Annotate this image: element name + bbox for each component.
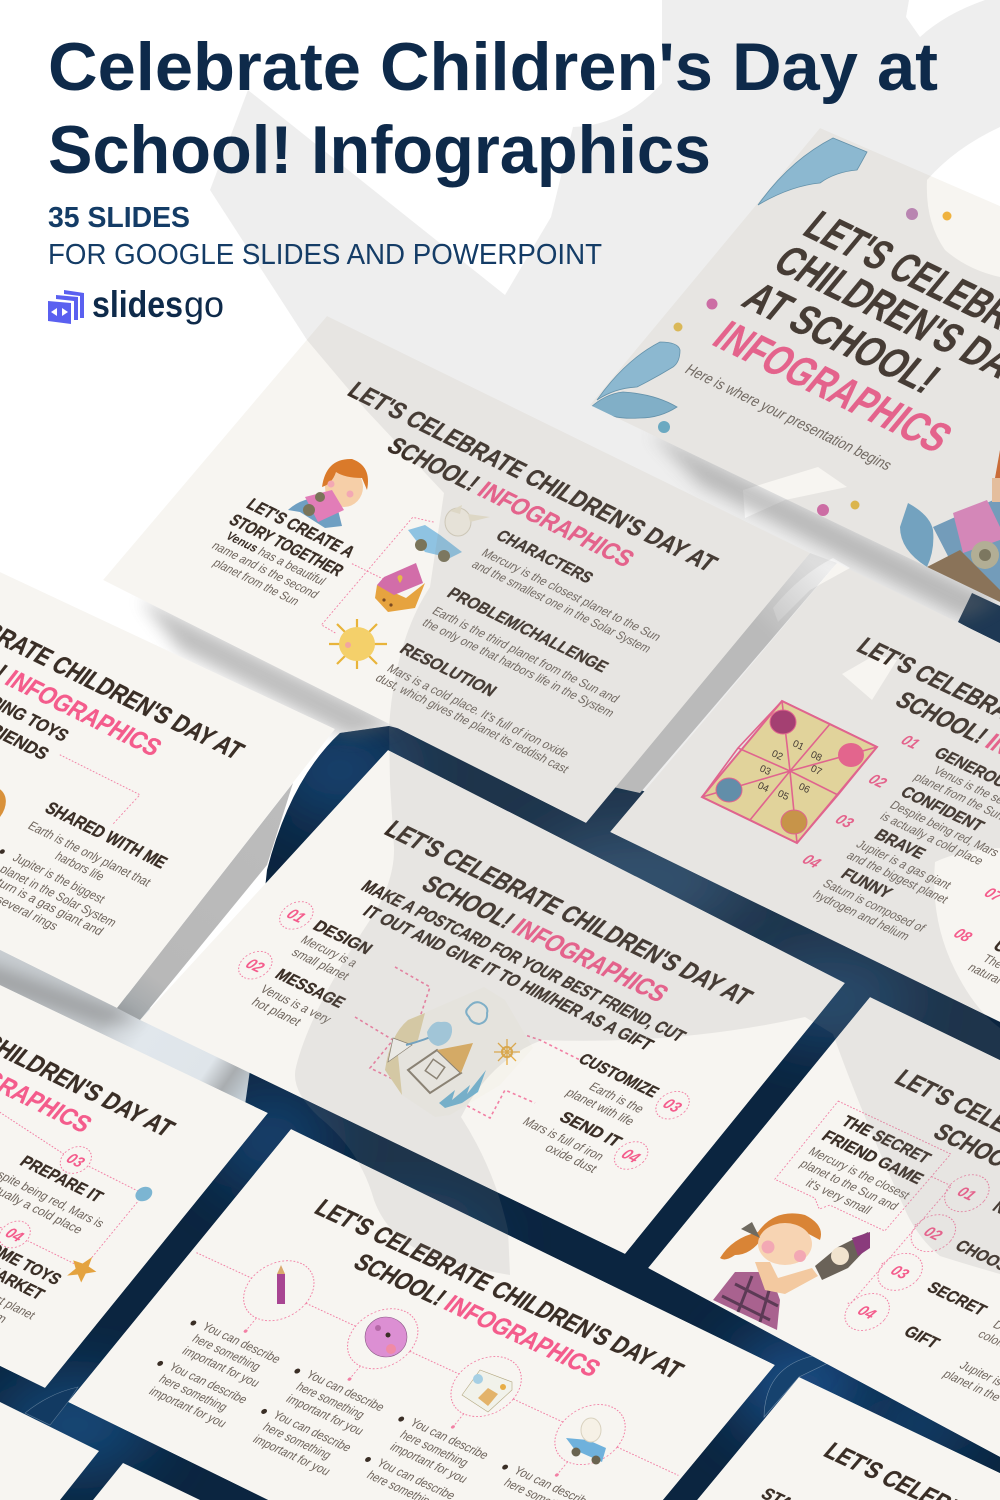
panel fold arc bottom left (25, 1387, 78, 1425)
heading: create a story: STORY TOGETHER (225, 511, 348, 580)
item 03 brave: and the biggest planet (844, 849, 952, 906)
text: prepare it: PREPARE IT (16, 1153, 107, 1206)
text: problem challenge: the only one that harbors life in the System (419, 616, 618, 720)
step 01 (279, 901, 374, 980)
item 04 funny: Saturn is composed of (820, 876, 929, 935)
column 3 bullets: here something (397, 1428, 472, 1470)
slide: sharing toys (0, 565, 335, 1008)
heading: swapping toys (0, 697, 69, 759)
step 03: Earth is the (586, 1080, 648, 1116)
step 04 (522, 1112, 648, 1173)
item 02 confident: Despite being red, Mars (887, 798, 1000, 859)
icon: small bunny car (566, 1418, 606, 1464)
callout text: planet to the Sun and (797, 1157, 902, 1213)
navy fragment under cover slide (958, 593, 1000, 645)
column 1 bullets: here something (189, 1332, 264, 1373)
diagram: paper fortune teller: 06 (797, 781, 812, 796)
item 02 confident: 02 (864, 771, 891, 792)
slide title: LET'S CELEBRATE CHILDREN'S DAY AT (378, 816, 758, 1011)
step 01: small planet (288, 946, 353, 983)
item 02 confident: is actually a cold place (877, 809, 987, 868)
icon: lower leaf two (590, 392, 677, 418)
step 03: 03 (659, 1096, 685, 1116)
cover title: INFOGRAPHICS (704, 312, 962, 461)
column 2 bullets: important for you (250, 1432, 334, 1478)
diagram: paper fortune teller: 02 (770, 748, 785, 763)
cover title: AT SCHOOL! (733, 274, 950, 402)
cover title (712, 210, 1000, 451)
column 2 bullets: important for you (283, 1392, 367, 1438)
step 03: planet with life (563, 1086, 638, 1128)
slide: prepare and buy (0, 942, 268, 1388)
number 04: 04 (1, 1225, 27, 1246)
text: venus description: name and is the second (209, 539, 322, 601)
shadow band between left slides (117, 783, 293, 1020)
item 01 generous (879, 729, 1000, 828)
item 08 unique: 08 (950, 925, 976, 946)
column 2 bullets: You can describe (303, 1368, 388, 1414)
text: characters: CHARACTERS (492, 527, 597, 587)
number circles: 03 (887, 1262, 913, 1283)
step 01: Mercury is a (298, 933, 361, 970)
column 1 bullets: You can describe (199, 1320, 284, 1366)
item 04 funny: 04 (798, 851, 825, 872)
text: prepare it (0, 1142, 123, 1242)
step 02: Venus is a very (257, 982, 335, 1026)
column 4 bullets (490, 1458, 596, 1500)
callout text: FRIEND GAME (818, 1127, 927, 1188)
number 03 (54, 1142, 98, 1178)
column 2 bullets: here something (293, 1380, 368, 1422)
illustration: boy with toy car (288, 459, 368, 528)
step 02 (238, 951, 346, 1026)
dashed connector (830, 1177, 951, 1304)
number 04 (0, 1217, 37, 1252)
icon: orange toy (0, 789, 6, 817)
text: buy toys (0, 1211, 68, 1335)
wordmark: slidesgo: go (184, 284, 224, 325)
icon: top leaf (758, 138, 867, 205)
icon: sun (329, 619, 387, 669)
diagram: paper fortune teller: 07 (809, 763, 824, 778)
slide: secret friend game (648, 997, 1000, 1457)
slide: bottom centre fragment (93, 1463, 200, 1500)
slide: bottom right (697, 1377, 1000, 1500)
slide title (0, 1036, 177, 1136)
icon: balloon (365, 1317, 407, 1357)
callout text (785, 1110, 943, 1226)
heading: create a story (230, 498, 354, 577)
slide title: INFOGRAPHICS (0, 666, 167, 762)
wordmark: slidesgo: slides (92, 284, 183, 325)
number circles: 04 (854, 1303, 880, 1323)
dashed connector (60, 754, 140, 824)
item 08 unique (934, 920, 1000, 1004)
slide title: SCHOOL! (416, 871, 520, 934)
callout text: it's very small (803, 1176, 875, 1217)
slide: cover (590, 128, 1000, 612)
icon: lower leaf (597, 342, 680, 400)
heading: make a postcard: MAKE A POSTCARD FOR YOUR BEST FRIEND, CUT (357, 876, 691, 1046)
step 02: 02 (241, 956, 268, 976)
slide title: INFOGRAPHICS (438, 1291, 606, 1382)
diagram: paper fortune teller: 04 (756, 780, 771, 795)
step 04: SEND IT (555, 1109, 625, 1151)
icon: small postcard (462, 1370, 512, 1412)
bullet list: planet in the Solar System (0, 862, 120, 930)
text: shared with me: Earth is the only planet that (25, 819, 154, 890)
callout text: THE SECRET (837, 1113, 935, 1167)
callout text: Mercury is the closest (805, 1144, 914, 1202)
step 04: Mars is full of iron (520, 1115, 607, 1163)
text: characters: Mercury is the closest planet to the Sun (479, 546, 664, 644)
slide title: LET'S CELEBRATE CHILDREN'S DAY AT (342, 377, 723, 577)
slide title: LET'S CELEBRATE CHILDREN'S DAY AT (309, 1195, 689, 1384)
slide: story together (103, 316, 810, 823)
item 02 confident (846, 769, 1000, 871)
main title (48, 29, 938, 188)
text: problem challenge: PROBLEM/CHALLENGE (443, 585, 612, 676)
subtitle: slide count: 35 SLIDES (48, 202, 190, 234)
slide: postcard (140, 750, 845, 1254)
diagram: paper fortune teller: 03 (758, 763, 773, 778)
navy backing panel (0, 726, 1000, 1500)
column 1 bullets (135, 1314, 284, 1431)
panel fold arc bottom right (764, 1355, 830, 1417)
slide: puzzle (610, 563, 1000, 1022)
bullet list: Jupiter is the biggest (10, 851, 109, 906)
slide title: SCHOOL! (889, 687, 993, 749)
soft shadow under second slide (140, 598, 400, 738)
slide title: SCHOOL! (348, 1249, 452, 1311)
step 04: oxide dust (542, 1141, 601, 1176)
slide title: INFOGRAPHICS (472, 477, 640, 572)
slide title (0, 625, 246, 758)
item 03 brave: Jupiter is a gas giant (853, 837, 955, 892)
slide title: SCHOOL! (381, 433, 485, 497)
step 02: hot planet (248, 995, 305, 1029)
dashed connector path (0, 1112, 139, 1264)
item descriptions (940, 1315, 1000, 1425)
number circles: 01 (953, 1184, 979, 1204)
illustration: child with toy (900, 450, 1000, 612)
icon: pencil (277, 1265, 285, 1304)
item 02 confident: CONFIDENT (897, 783, 988, 835)
step 04: 04 (617, 1146, 644, 1167)
dashed connectors to postcard (355, 967, 580, 1118)
column 2 bullets (239, 1362, 388, 1479)
column 1 bullets: important for you (146, 1384, 230, 1430)
soft shadow under cover slide (650, 432, 1000, 620)
item labels (884, 1197, 1000, 1358)
item 03 brave: BRAVE (871, 826, 929, 863)
column 1 bullets: You can describe (166, 1360, 251, 1407)
text: venus description: Venus has a beautiful (223, 529, 329, 588)
text: resolution: RESOLUTION (396, 640, 500, 700)
item 04 funny (781, 848, 942, 946)
illustration: postcard drawing (385, 1001, 524, 1108)
slide title: INFOGRAPHICS (506, 914, 674, 1008)
shadow band between top slides (613, 553, 837, 793)
column 2 bullets: You can describe (270, 1408, 355, 1455)
translucent background shape (210, 0, 1000, 1275)
heading: create a story: LET'S CREATE A (243, 495, 359, 561)
slide: four icons process (68, 1129, 775, 1500)
text: shared with me: SHARED WITH ME (41, 798, 171, 872)
text: characters: and the smallest one in the Solar System (469, 558, 654, 655)
diagram: paper fortune teller (702, 701, 877, 843)
text: shared with me: harbors life (52, 849, 108, 884)
item 04 funny: hydrogen and helium (810, 888, 913, 943)
step 02: MESSAGE (271, 966, 348, 1011)
dashed circles and links (162, 1225, 701, 1500)
number circles: 02 (920, 1224, 946, 1244)
shadow gap: pale area under left slide (0, 930, 250, 1105)
step 03: CUSTOMIZE (574, 1051, 662, 1101)
step 03 (564, 1054, 690, 1125)
cover subtitle: Here is where your presentation begins (681, 362, 895, 474)
item 01 generous: 01 (897, 732, 923, 753)
text: resolution: dust, which gives the planet its reddish cast (372, 671, 573, 776)
icon: bunny in car (408, 505, 490, 562)
column 3 bullets (352, 1410, 492, 1500)
dashed callout box (767, 1101, 951, 1237)
number circles (834, 1169, 1000, 1337)
soft shadow under left slide (0, 960, 140, 1025)
main title: School! Infographics (48, 112, 711, 188)
item 04 funny: FUNNY (837, 865, 896, 902)
diagram: paper fortune teller: 08 (809, 749, 824, 764)
icon: toy house (375, 563, 425, 612)
item labels: SECRET (923, 1279, 990, 1319)
column 3 bullets: You can describe (407, 1416, 492, 1462)
text: venus description: planet from the Sun (210, 556, 303, 608)
dashed bracket (322, 517, 434, 634)
text: problem challenge: Earth is the third planet from the Sun and (429, 604, 623, 706)
column 2 bullets: here something (260, 1420, 335, 1462)
column 1 bullets: here something (156, 1372, 231, 1414)
step 01: 01 (283, 906, 309, 926)
number 03: 03 (62, 1150, 88, 1171)
step 01: DESIGN (309, 918, 376, 958)
slide: bottom left fragment (0, 1402, 99, 1500)
heading: make a postcard: IT OUT AND GIVE IT TO HIM/HER AS A GIFT (359, 901, 659, 1054)
diagram: paper fortune teller: 05 (776, 788, 791, 803)
diagram: paper fortune teller: 01 (791, 738, 806, 753)
icon: blue bead (132, 1184, 156, 1204)
column 3 bullets: important for you (387, 1440, 471, 1486)
text: resolution: Mars is a cold place. It's full of iron oxide (384, 662, 573, 761)
decorative dots (658, 208, 952, 516)
subtitle: platforms: FOR GOOGLE SLIDES AND POWERPOINT (48, 239, 602, 271)
item 03 brave (814, 809, 974, 906)
column 1 bullets: important for you (179, 1344, 263, 1390)
item 03 brave: 03 (831, 811, 858, 832)
icon: star (63, 1251, 104, 1285)
illustration: girl with rocket toy (713, 1213, 870, 1330)
item labels: GIFT (900, 1323, 943, 1352)
icon: slidesgo logo mark (48, 290, 84, 324)
main title: Celebrate Children's Day at (48, 29, 938, 105)
